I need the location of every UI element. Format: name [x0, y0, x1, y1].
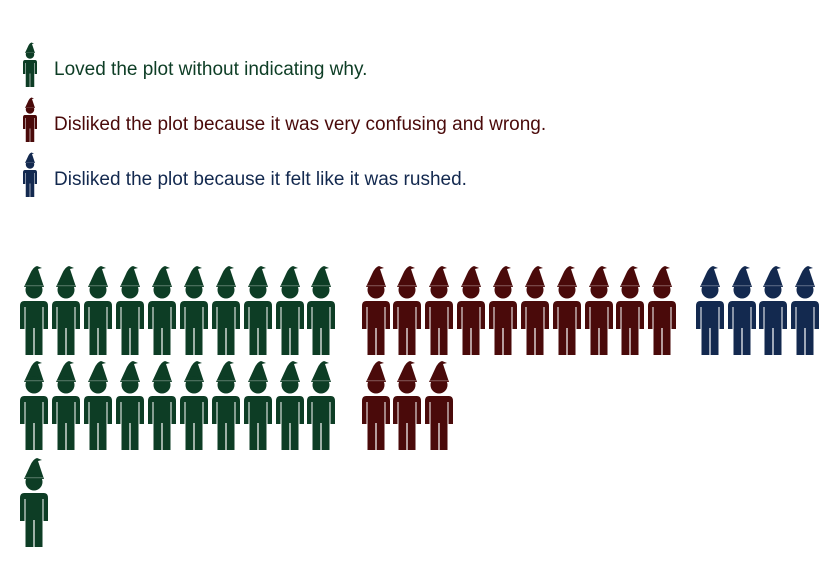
pictogram: blue rushed (4)	[696, 266, 819, 355]
legend icon: blue	[23, 152, 37, 197]
pictogram: green loved (21)	[20, 266, 335, 547]
legend text: rushed: Disliked the plot because it felt like it was rushed.	[54, 169, 467, 190]
legend text: loved: Loved the plot without indicating why.	[54, 59, 367, 80]
pictogram: red confusing (13)	[362, 266, 676, 450]
legend text: confusing: Disliked the plot because it was very confusing and wrong.	[54, 114, 546, 135]
legend icon: red	[23, 98, 37, 142]
legend icon: green	[23, 42, 37, 87]
